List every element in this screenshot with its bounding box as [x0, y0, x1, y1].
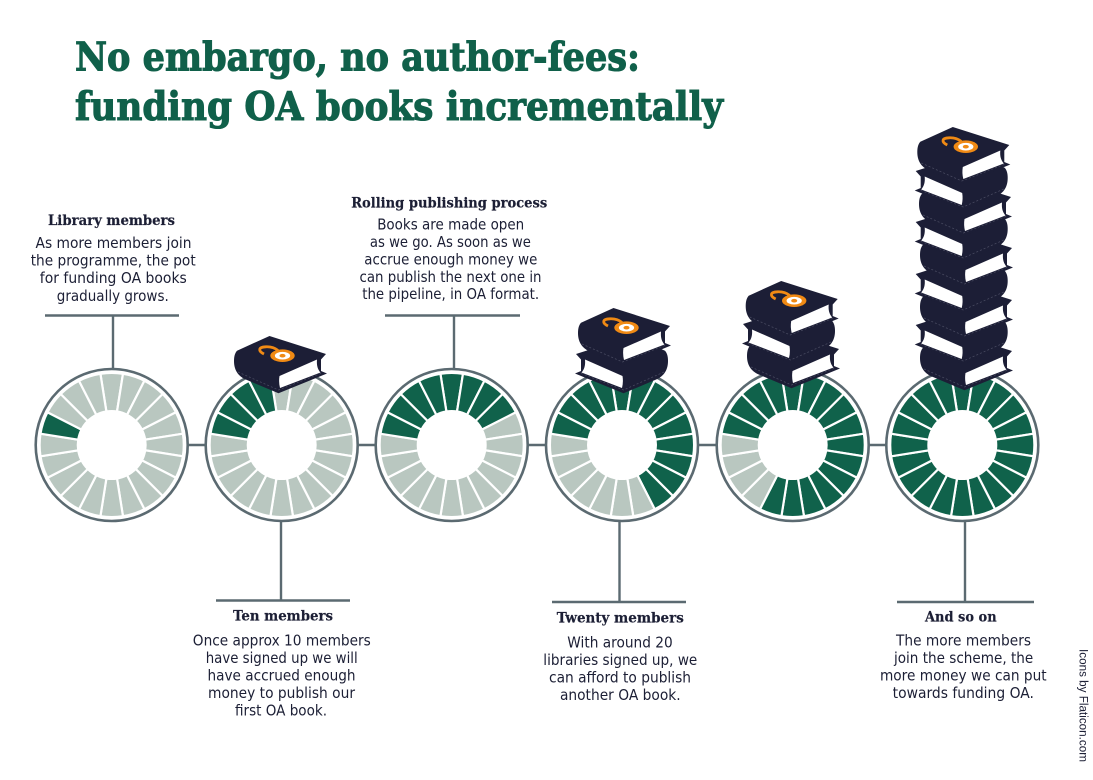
icon: stack of nine books: [915, 127, 1013, 390]
callout: and so on: join the scheme, the: [893, 650, 1033, 667]
callout: rolling publishing process: Rolling publishing process: [351, 195, 547, 211]
icon: stack of two books: [575, 308, 671, 393]
wheel 2: four segments filled: [206, 369, 358, 521]
callout: twenty members: can afford to publish: [549, 670, 691, 686]
callout: library members: the programme, the pot: [31, 252, 196, 270]
callout: library members: gradually grows.: [57, 288, 169, 305]
callout: library members: As more members join: [36, 235, 192, 252]
callout: ten members: Once approx 10 members: [193, 633, 371, 650]
callout: twenty members: [543, 522, 697, 704]
icon: one book: [234, 336, 327, 393]
callout: rolling publishing process: the pipeline, in OA format.: [362, 286, 539, 303]
callout: ten members: money to publish our: [208, 685, 356, 702]
callout: rolling publishing process: accrue enough money we: [364, 251, 537, 268]
icon: stack of three books: [742, 281, 840, 388]
callout: ten members: first OA book.: [235, 703, 327, 720]
callout: ten members: have accrued enough: [208, 668, 356, 685]
title: [75, 35, 724, 130]
callout: rolling publishing process: can publish the next one in: [360, 269, 542, 286]
callout: and so on: [880, 522, 1047, 702]
title: funding OA books incrementally: [75, 84, 724, 130]
timeline connector: [188, 444, 886, 446]
callout: ten members: have signed up we will: [206, 650, 358, 667]
callout: and so on: The more members: [895, 633, 1031, 650]
callout: rolling publishing process: [351, 195, 547, 370]
callout: and so on: And so on: [924, 610, 997, 626]
callout: ten members: Ten members: [233, 609, 333, 625]
wheel 6: all segments filled: [886, 369, 1038, 521]
callout: library members: Library members: [48, 213, 175, 229]
callout: twenty members: With around 20: [567, 634, 673, 652]
callout: twenty members: Twenty members: [557, 610, 684, 626]
callout: ten members: [193, 522, 371, 720]
callout: rolling publishing process: Books are made open: [377, 216, 524, 233]
wheel 5: sixteen segments filled: [717, 369, 869, 521]
credit: Icons by Flaticon.com: [1076, 649, 1088, 762]
wheel 1: one segment filled: [36, 369, 188, 521]
title: No embargo, no author-fees:: [75, 35, 640, 81]
callout: rolling publishing process: as we go. As soon as we: [370, 234, 531, 251]
callout: twenty members: libraries signed up, we: [543, 652, 697, 669]
callout: twenty members: another OA book.: [560, 687, 681, 704]
callout: and so on: towards funding OA.: [893, 685, 1034, 702]
wheel 3: eight segments filled: [376, 369, 528, 521]
wheel 4: thirteen segments filled: [546, 369, 698, 521]
callout: and so on: more money we can put: [880, 668, 1047, 685]
callout: library members: for funding OA books: [40, 270, 187, 287]
callout: library members: [31, 213, 196, 370]
